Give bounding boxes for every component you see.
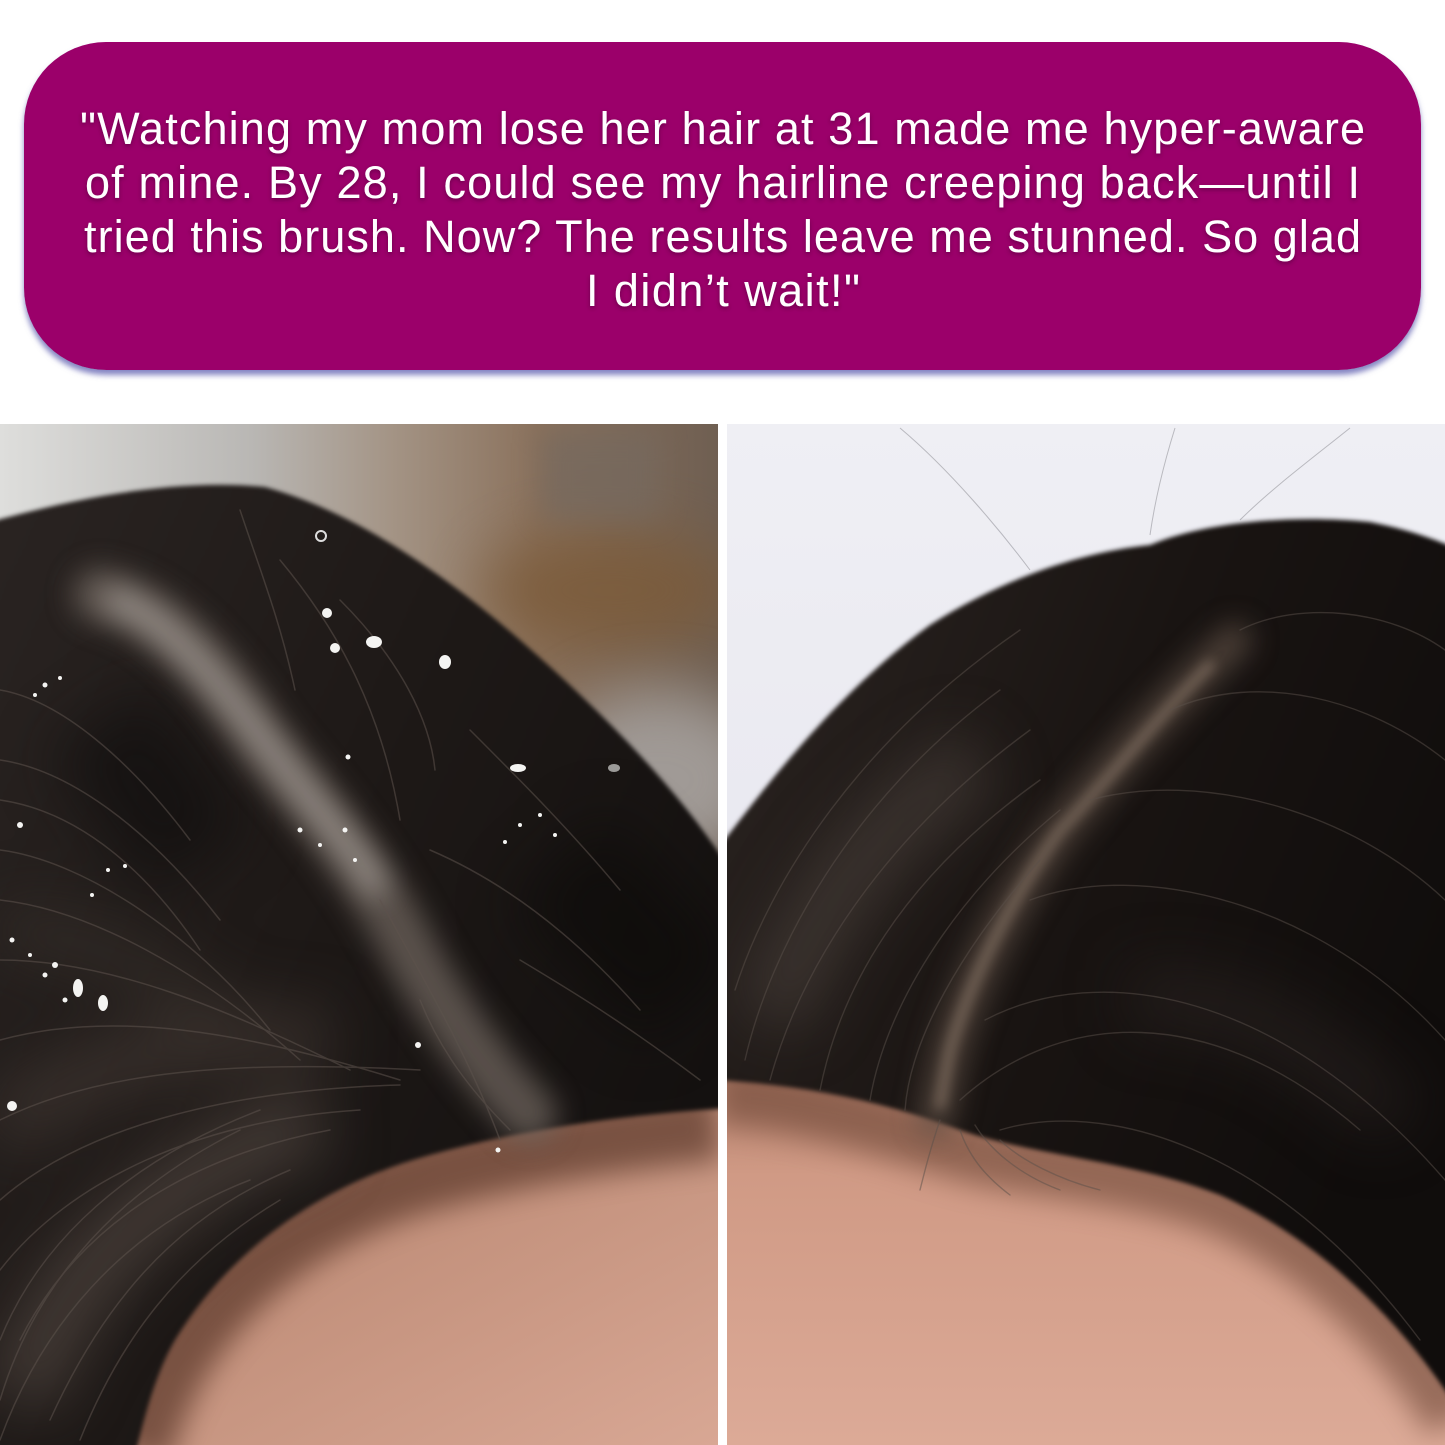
forehead skin: [727, 1060, 1445, 1445]
forehead skin: [136, 1106, 718, 1445]
panel background: [24, 42, 1421, 370]
blurred background: [0, 424, 718, 857]
hair tone variation: [770, 760, 1400, 1120]
shadow of hair on skin: [135, 1125, 718, 1445]
testimonial quote text: tried this brush. Now? The results leave me stunned. So glad: [84, 211, 1361, 262]
testimonial quote text: "Watching my mom lose her hair at 31 made me hyper-aware: [80, 103, 1365, 154]
hair strands: [735, 613, 1445, 1340]
testimonial quote text: of mine. By 28, I could see my hairline creeping back—until I: [85, 157, 1360, 208]
hair tone variation: [0, 712, 338, 1416]
dandruff flakes: [7, 531, 620, 1152]
testimonial quote text: [80, 103, 1365, 316]
flyaway hairs: [900, 428, 1350, 570]
dark hair mass: [0, 485, 730, 1445]
scalp parting: [935, 640, 1235, 1120]
quote panel: [24, 42, 1421, 370]
hair strands: [0, 510, 700, 1440]
scalp parting: [100, 595, 530, 1115]
light background: [727, 424, 1445, 838]
testimonial quote text: I didn’t wait!": [586, 265, 860, 316]
shadow of hair on skin: [717, 1095, 1445, 1420]
after photo: healthy hairline: [717, 424, 1445, 1445]
before photo: scalp with dandruff: [0, 424, 770, 1445]
dark hair mass: [717, 519, 1445, 1405]
